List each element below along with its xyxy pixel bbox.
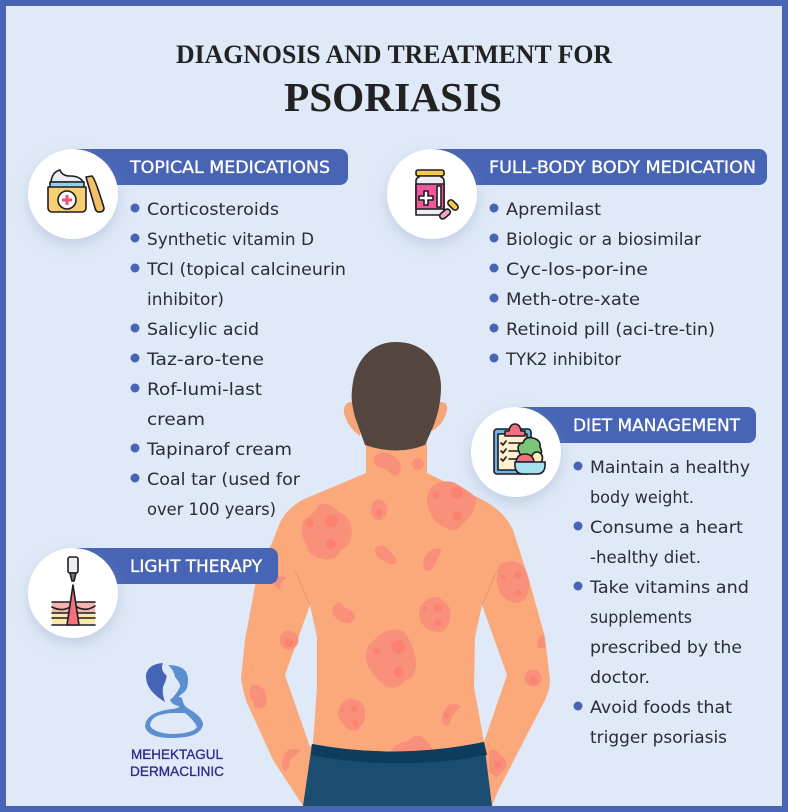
title: DIAGNOSIS AND TREATMENT FOR [176, 40, 612, 69]
hair [352, 342, 441, 450]
bullet list: Maintain a healthy [590, 458, 750, 478]
heading bar [434, 149, 767, 185]
heading bar [75, 149, 348, 185]
bullet list [574, 458, 750, 748]
icon: clipboard and salad bowl [471, 407, 561, 497]
patches [249, 453, 546, 777]
bullet list: Biologic or a biosimilar [506, 230, 701, 250]
bullet list: Meth-otre-xate [506, 290, 640, 310]
bullet list [490, 200, 715, 370]
panel: full-body medication [387, 149, 767, 370]
bullet list: Rof-lumi-last [147, 380, 262, 400]
bullet list: Take vitamins and [589, 578, 749, 598]
bullet list: TCI (topical calcineurin [146, 260, 346, 280]
logo text: MEHEKTAGUL [131, 747, 223, 762]
bullet list: Tapinarof cream [146, 440, 292, 460]
bullet list: Salicylic acid [147, 320, 259, 340]
bullet list: supplements [590, 608, 692, 628]
body [241, 440, 550, 806]
ears [344, 402, 447, 436]
icon: medicine bottle [387, 149, 477, 239]
logo [131, 663, 223, 762]
panel: light therapy [28, 548, 278, 638]
heading bar: TOPICAL MEDICATIONS [129, 158, 330, 178]
bullet list: over 100 years) [147, 500, 276, 520]
shorts [303, 742, 492, 806]
heading bar: FULL-BODY BODY MEDICATION [489, 158, 756, 178]
bullet list [130, 200, 346, 520]
arm gaps [285, 605, 507, 747]
bullet list: trigger psoriasis [590, 728, 727, 748]
bullet list: doctor. [590, 668, 650, 688]
patch spots [285, 487, 537, 768]
bullet list: prescribed by the [590, 638, 742, 658]
bullet list: Avoid foods that [590, 698, 732, 718]
illustration: man's back with psoriasis [241, 342, 550, 806]
bullet list: Consume a heart [590, 518, 743, 538]
bullet list: -healthy diet. [590, 548, 701, 568]
bullet list: body weight. [590, 488, 694, 508]
logo subtitle: DERMACLINIC [130, 764, 224, 779]
icon: cream jar [28, 149, 118, 239]
waistband [311, 742, 487, 764]
panel: diet management [471, 407, 756, 748]
bullet list: TYK2 inhibitor [505, 350, 621, 370]
bullet list: Cyc-los-por-ine [506, 260, 648, 280]
heading bar: DIET MANAGEMENT [573, 416, 741, 436]
logo mark [145, 663, 203, 738]
heading bar [518, 407, 756, 443]
bullet list: cream [147, 410, 205, 430]
title [176, 40, 612, 120]
panel: topical medications [28, 149, 348, 520]
bullet list: Coal tar (used for [147, 470, 300, 490]
bullet list: Retinoid pill (aci-tre-tin) [506, 320, 715, 340]
bullet list: Corticosteroids [147, 200, 279, 220]
icon: laser on skin [28, 548, 118, 638]
bullet list: Synthetic vitamin D [147, 230, 314, 250]
bullet list: Apremilast [506, 200, 601, 220]
bullet list: inhibitor) [147, 290, 224, 310]
heading bar [75, 548, 278, 584]
heading bar: LIGHT THERAPY [130, 557, 263, 577]
title: PSORIASIS [284, 74, 502, 120]
bullet list: Taz-aro-tene [146, 350, 264, 370]
armpit creases [295, 570, 497, 605]
